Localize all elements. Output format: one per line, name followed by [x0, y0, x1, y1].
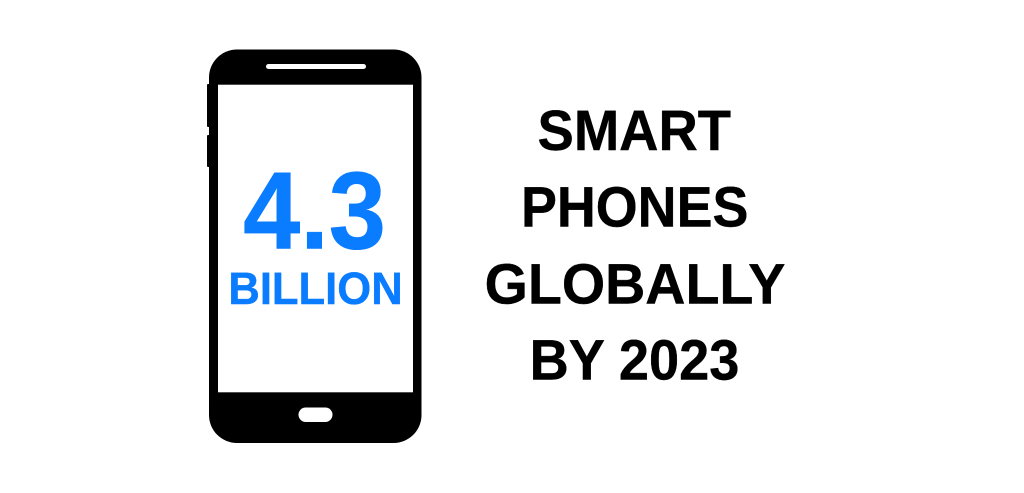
- icon: smartphone: [207, 50, 422, 443]
- home button: [298, 408, 332, 422]
- speaker slot: [266, 64, 366, 69]
- unit label: BILLION: [228, 263, 403, 314]
- line: phones: PHONES: [521, 175, 748, 239]
- phone screen: [218, 85, 413, 392]
- line: by 2023: BY 2023: [530, 329, 739, 393]
- side button lower: [207, 135, 211, 167]
- phone body: [209, 50, 422, 443]
- side button upper: [207, 84, 211, 127]
- line: smart: SMART: [538, 99, 731, 163]
- big number: 4.3: [243, 150, 386, 273]
- line: globally: GLOBALLY: [485, 252, 785, 316]
- headline text: [485, 99, 785, 393]
